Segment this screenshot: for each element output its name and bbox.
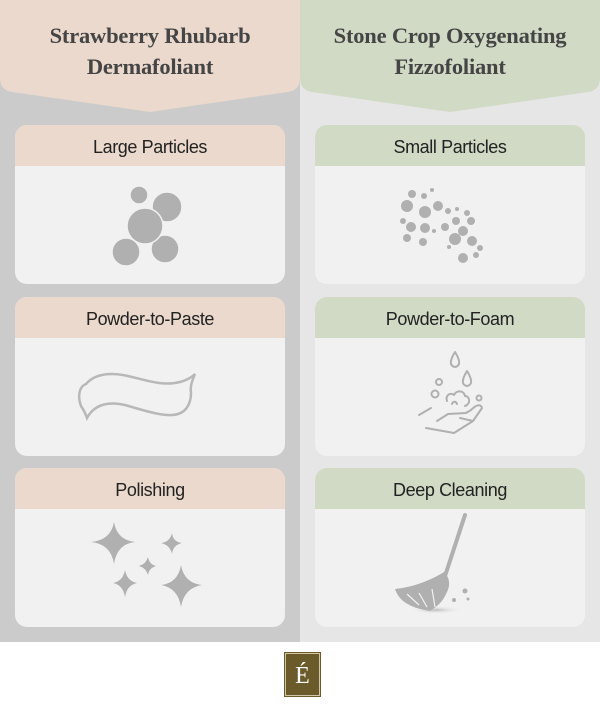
banner: left [0,0,300,112]
card: Small Particles [315,125,585,284]
title: left [50,23,250,79]
icon: broom [395,513,470,612]
card: Small Particles: Small Particles [393,137,507,157]
card: Powder-to-Paste [15,297,285,456]
card: Powder-to-Foam [315,297,585,456]
title: right: Stone Crop Oxygenating [334,23,566,48]
title: left: Strawberry Rhubarb [50,23,250,48]
logo: É [295,663,310,689]
card: Deep Cleaning [315,468,585,627]
card: Powder-to-Foam: Powder-to-Foam [386,309,514,329]
title: right [334,23,566,79]
title: right: Fizzofoliant [394,54,506,79]
background columns [0,0,300,642]
card: Polishing [15,468,285,627]
card: Powder-to-Paste: Powder-to-Paste [86,309,214,329]
icon: sparkles [92,522,202,606]
card: Large Particles: Large Particles [93,137,207,157]
title: left: Dermafoliant [87,54,213,79]
icon: paste wave [78,372,196,421]
card: Deep Cleaning: Deep Cleaning [393,480,507,500]
logo [285,653,320,696]
card: Polishing: Polishing [115,480,185,500]
icon: large particles [112,186,182,266]
icon: small particles [400,188,483,263]
card: Large Particles [15,125,285,284]
banner: right [300,0,600,112]
icon: foam hand [418,351,483,434]
